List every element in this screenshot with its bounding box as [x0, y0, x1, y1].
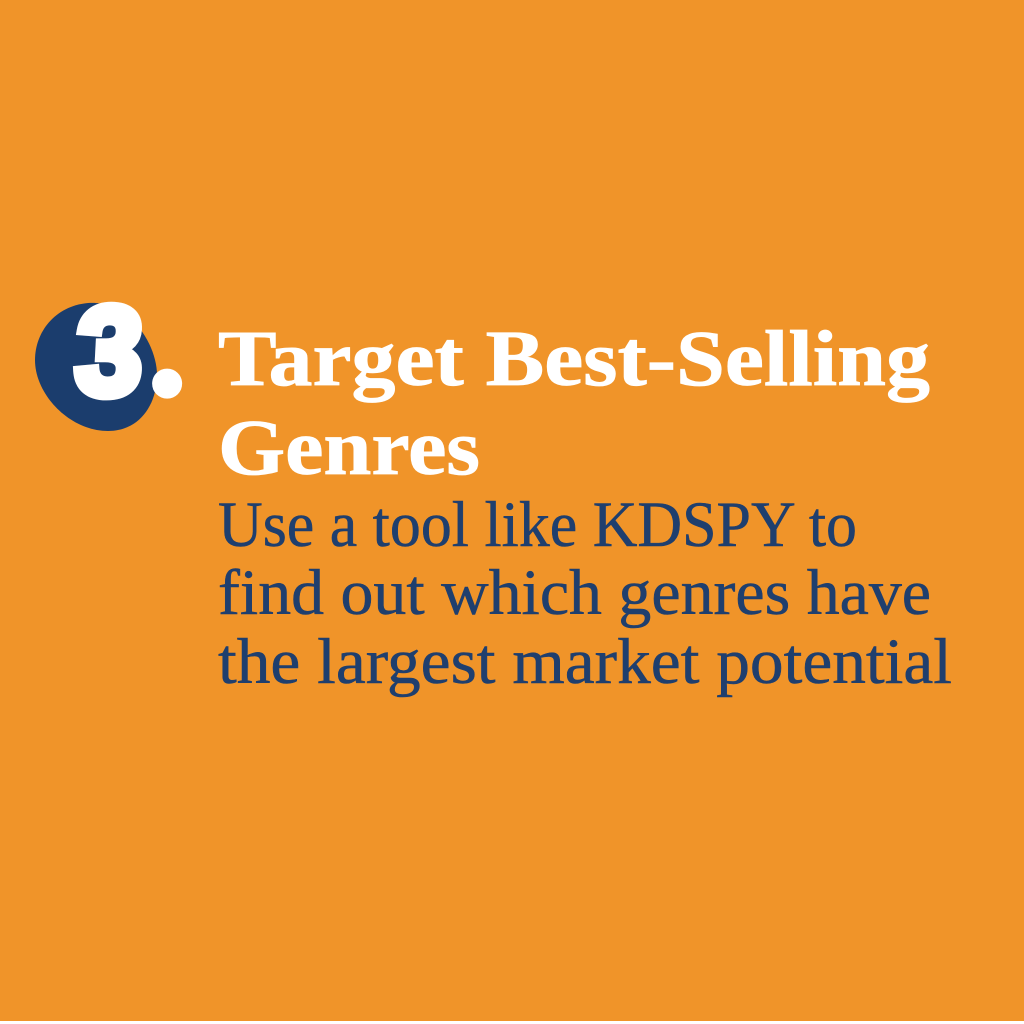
heading [218, 316, 930, 492]
body text: the largest market potential [218, 626, 952, 698]
step number badge [35, 232, 190, 437]
body text: find out which genres have [218, 557, 931, 629]
heading: Target Best-Selling [218, 316, 930, 403]
white period: . [144, 232, 190, 437]
numeral three: 3 [73, 280, 146, 421]
navy blob [35, 303, 157, 431]
body text [218, 489, 952, 698]
body text: Use a tool like KDSPY to [218, 489, 857, 561]
heading: Genres [218, 405, 480, 492]
